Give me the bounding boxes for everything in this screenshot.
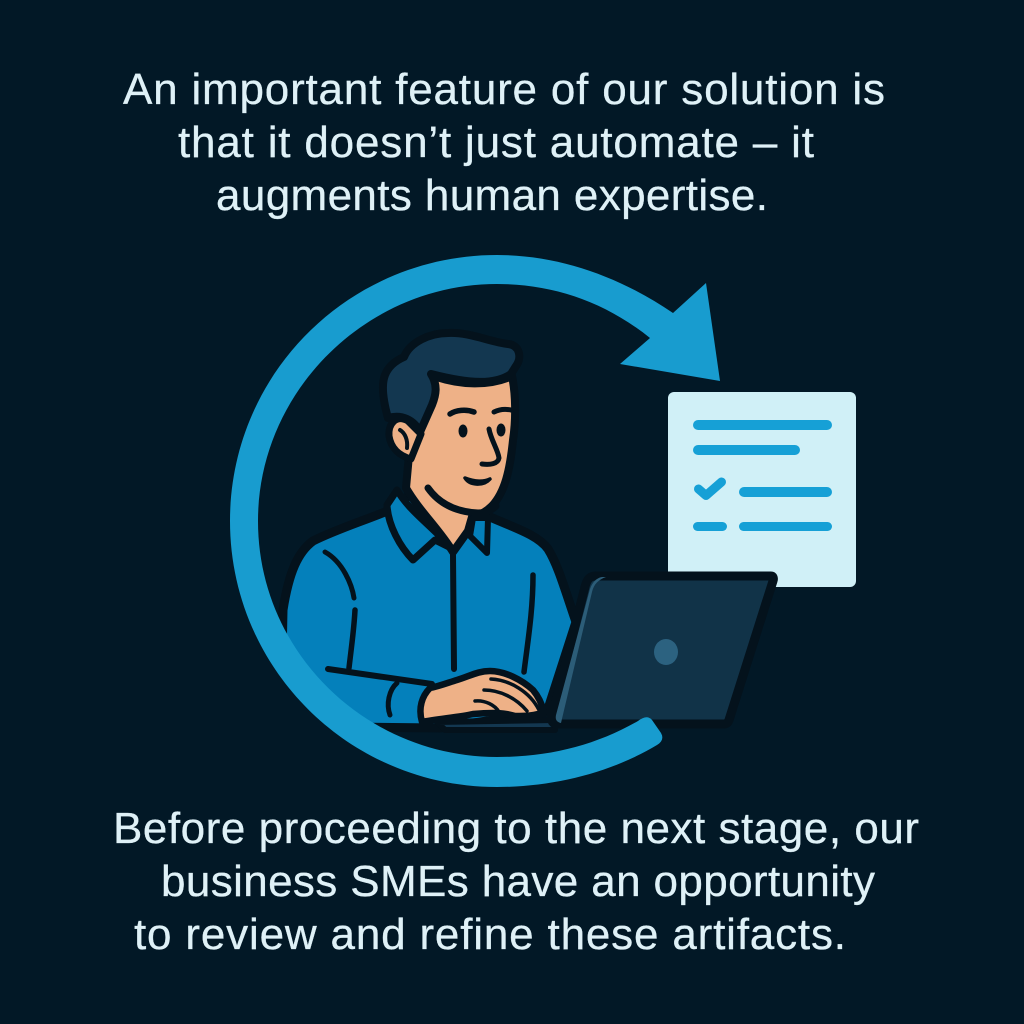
hair <box>383 333 519 432</box>
top statement text <box>123 65 885 220</box>
circular arrow <box>230 255 720 787</box>
shirt <box>282 495 576 728</box>
laptop <box>552 576 773 724</box>
facial features <box>450 410 474 414</box>
bottom statement text <box>113 804 919 959</box>
icon: check mark <box>698 482 722 496</box>
laptop base <box>437 720 555 730</box>
laptop logo <box>654 639 678 665</box>
ear <box>389 419 421 459</box>
top statement text: that it doesn’t just automate – it <box>178 118 814 167</box>
person at laptop <box>282 333 576 730</box>
bottom statement text: business SMEs have an opportunity <box>161 857 875 906</box>
top statement text: augments human expertise. <box>216 171 768 220</box>
icon: document checklist <box>668 392 856 587</box>
shirt collar <box>387 490 451 560</box>
bottom statement text: Before proceeding to the next stage, our <box>113 804 919 853</box>
bottom statement text: to review and refine these artifacts. <box>134 910 846 959</box>
top statement text: An important feature of our solution is <box>123 65 885 114</box>
neck and face <box>406 375 515 552</box>
shirt detail lines <box>453 555 454 669</box>
hand <box>420 671 544 722</box>
